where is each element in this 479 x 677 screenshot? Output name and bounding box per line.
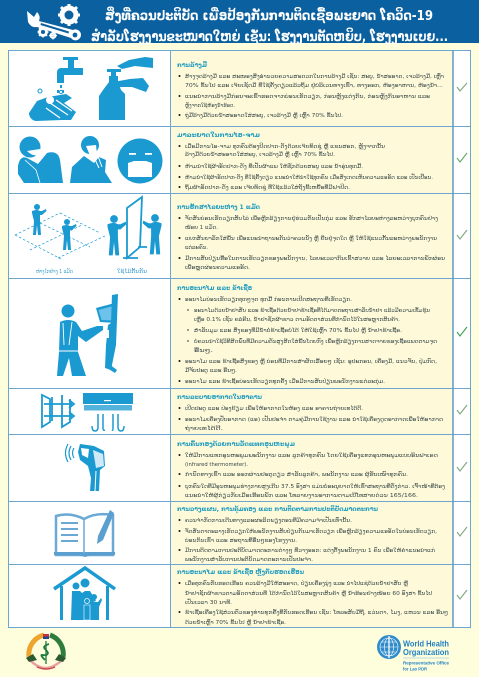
section text: 1 metre distancing: ແຍກສັນຍາລັກໃສ່ພື້ນ ເພື່ອແນະນຳຖານະກັນວ່າຄວນນັ່ງ ຫຼື ຢືນຢູ່ຈຸດໃດ ຫຼື ໃຫ້ໃຊ້ແນວກັ້ນລະຫວ່າງພະນັກງານ (185, 235, 437, 242)
icon: hand washing and sanitizer (29, 57, 153, 121)
section text: hand washing: ສ້າງຈຸດລ້າງມື ແລະ ສະໜອງສິ່ງອຳນວຍຄວາມສະດວກໃນການລ້າງມື ເຊັ່ນ: ສະບູ, ນໍ້າສະອາດ, ເຈວລ້າງມື, ເຫຼົ້າ (185, 73, 444, 80)
section text: cleaning and disinfection: ອະນາໄມດ້ວຍນໍ້າຢາສັບ ແລະ ຂ້າເຊື້ອດ້ວຍນໍ້າຢາຂ້າເຊື້ອທີ່ໄດ້ມາດຕະຖານສຳລັບນໍ້າຢາ ແລ້ວມີຄວາມເຂັ້ມຂຸ້ນ (194, 306, 430, 314)
distancing captions (36, 267, 147, 275)
title (91, 6, 448, 45)
icon: open book and pencil (54, 510, 115, 557)
section text: 1 metre distancing (177, 202, 445, 271)
check marks (457, 83, 467, 599)
section text: 1 metre distancing: ໜ້ອຍ 1 ແມັດ. (185, 224, 218, 231)
section text: hand washing: 70% ຂຶ້ນໄປ ແລະ ເຈ້ຍເຊັດມື ທີ່ໃຊ້ຄັ້ງດຽວແລ້ວຖິ້ມ ຢູ່ບໍລິເວນທາງເຂົ້າ, ທາງອອກ, ຫ້ອງອາຫານ, ຫ້ອງນ້ຳ... (185, 81, 443, 89)
section text: cough etiquette: ມາລະຍາດໃນການໄອ-ຈາມ (177, 131, 260, 139)
icon: coughing etiquette and mask (18, 136, 162, 184)
section text: cough etiquette: ຫ້າມນຳໃຊ້ຜ້າອັດປາກ-ດັງ ທີ່ເປັນຜ້າແພ ໃຫ້ຊັກດ້ວຍສະບູ ແລະ ນໍ້າອຸ່ນທຸກມື້. (185, 162, 363, 170)
header banner (0, 0, 479, 45)
section text: 1 metre distancing: ຈັດສັນບ່ອນເຮັດວຽກສັບໄລ່ ເພື່ອຫຼີກລ້ຽງການຢູ່ຮ່ວມກັນເປັນກຸ່ມ ແລະ ຮັກສາໄລຍະຫ່າງລະຫວ່າງບຸກຄົນຢ່າງ (184, 214, 438, 222)
section text: cleaning and disinfection: ອື່ນໆ. (193, 347, 213, 354)
section text: cleaning at accommodation: ຂ້າເຊື້ອເຄື່ອງໃຊ້ສ່ວນຕົວຂອງທ່ານທຸກຄັ້ງທີ່ກັບຮອດເຮືອນ ເຊັ່ນ: ໂທລະສັບມືຖື, ແວ່ນຕາ, ໄມງ, ແຫວນ ແລະ ອື່ນໆ (185, 608, 448, 616)
section text: cleaning and disinfection (177, 283, 437, 385)
section text: cleaning and disinfection: ເຫຼືອ 0.1% ເຊັ່ນ ຄລໍຣີນ, ນໍ້າຢາຊັກຜ້າຂາວ ຕາມອັດຕາສ່ວນທີ່ກຳນົດໄວ້ໃນສະຫຼາກສິນຄ້າ. (194, 315, 400, 323)
distancing captions: ໃຊ້ໄມ້ກັ້ນກັນ (117, 267, 147, 275)
section text: indoor ventilation: ເປີດປະຕູ ແລະ ປ່ອງຢ້ຽມ ເພື່ອໃຫ້ອາກາດໃນຫ້ອງ ແລະ ອາຄານຖ່າຍເທໄດ້ດີ. (185, 404, 363, 412)
section text: indoor ventilation: ຖ່າຍເທໄດ້ດີ. (185, 424, 223, 432)
section text: temperature screening: ໃຫ້ມີການແທກອຸນຫະພູມພະນັກງານ ແລະ ລູກຄ້າທຸກຄົນ ໂດຍໃຊ້ເຄື່ອງແທກອຸນຫະພູມແບບອິນຟາເຣດ (185, 452, 438, 459)
section text: cleaning and disinfection: ອະນາໄມ ແລະ ຂ້າເຊື້ອສິ່ງຂອງ ຫຼື ບ່ອນທີ່ມີການສຳຜັດເລື້ອຍໆ ເຊັ່ນ: ອຸປະກອນ, ເຄື່ອງມື, ແນວຈັບ, ປຸ່ມກົດ, (185, 357, 437, 365)
logo: World Health Organization (377, 635, 450, 672)
section text: cleaning and disinfection: ມືຈັບປະຕູ ແລະ ອື່ນໆ. (185, 367, 237, 374)
logo: Lao Ministry of Health (26, 634, 66, 669)
icon: ventilation and air conditioner (42, 393, 133, 431)
section text: temperature screening: ການຄົ້ນກອງດ້ວຍການວັດແທກອຸນຫະພູມ (177, 439, 295, 449)
section text: 1 metre distancing: ແຕ່ລະຄົນ. (185, 244, 208, 251)
logo: World Health Organization: World Health (403, 640, 449, 648)
section text: cleaning at accommodation: ນໍ້າຢາຊັກຜ້າຂາວຕາມອັດຕາສ່ວນທີ່ ໄດ້ກຳນົດໄວ້ໃນສະຫຼາກສິນຄ້າ ຫຼື ນໍ້າຮ້ອນຢ່າງໜ້ອຍ 60 ອົງສາ ຂຶ້ນໄປ (185, 589, 433, 597)
section text: planning, control and monitoring: ບ່ອນກິນເຂົ້າ ແລະ ສະຖານທີ່ອື່ນໆຂອງໂຮງງານ. (185, 537, 297, 544)
section text: cleaning and disinfection: ອະນາໄມ ແລະ ຂ້າເຊື້ອບ່ອນເຮັດວຽກທຸກຄັ້ງ ເມື່ອມີການສັບປ່ຽນພະນັກງານແຕ່ລະກຸ່ມ. (185, 377, 385, 385)
section text: hand washing: ຫຼັງຈາກໃຊ້ຫ້ອງນ້ຳຮ້ອດ. (185, 102, 235, 109)
section text: 1 metre distancing: ມີການສັບປ່ຽນຮື້ອໃນການເຮັດວຽກຂອງພະນັກງານ, ໄລຍະເວລາກິນເຂົ້າສວາຍ ແລະ ໄລຍະເວລາການພັກຜ່ອນ (185, 254, 445, 262)
section text: planning, control and monitoring: ມີການຕິດຕາມການປະຕິບັດມາດຕະການຕ່າງໆ ທີ່ວາງອອກ: ແຕ່ງຕັ້ງພະນັກງານ 1 ຄົນ ເພື່ອໃຫ້ຄຳແນະນຳແກ່ (185, 547, 435, 554)
section text: planning, control and monitoring: ຈັດສັນຕາຕະລາງເຮັດວຽກໃຫ້ພະນັກງານສັບປ່ຽນກັນມາເຮັດວຽກ ເພື່ອຫຼີກລ້ຽງຄວາມແອອັດໃນບ່ອນເຮັດວຽກ, (184, 528, 437, 535)
section text: temperature screening (177, 439, 445, 499)
section text: indoor ventilation: ການລະບາຍອາກາດໃນອາຄານ (177, 393, 262, 401)
section text: indoor ventilation (177, 393, 443, 432)
section text: hand washing: ຖູ່ມືລ້າງມືດ້ວຍນໍ້າສະອາດໃສ່ສະບູ, ເຈວລ້າງມື ຫຼື ເຫຼົ້າ 70% ຂຶ້ນໄປ. (185, 111, 343, 120)
section text: cleaning and disinfection: ສຳລັບມຸມ ແລະ ສິ່ງຂອງທີ່ມີນໍ້າບໍ່ຂ້າເຊື້ອບໍ່ໄດ້ ໃຫ້ໃຊ້ເຫຼົ້າ 70% ຂຶ້ນໄປ ຫຼື ນໍ້າຢາຂ້າເຊື້ອ. (194, 326, 402, 334)
logo: World Health Organization: for Lao PDR (403, 666, 428, 672)
section text: planning, control and monitoring: ພະນັກງານສຳລັບການປະຕິບັດມາດຕະການເປັນປະຈຳ. (185, 555, 313, 563)
section text: cough etiquette: ຫ້າມນຳໃຊ້ຜ້າອັດປາກ-ດັງ ທີ່ໃຊ້ຄັ້ງດຽວ ແນະນຳໃຫ້ນຳໃຊ້ທຸກຄົນ ເມື່ອສັງເກດເຫັນຄວາມແອອັດ ແລະ ເປັນເປື້ອນ. (185, 173, 433, 181)
section text: cleaning at accommodation: ເມື່ອທຸກຄົນກັບຮອດເຮືອນ ຄວນລ້າງມືໃຫ້ສະອາດ, ປ່ຽນເຄື່ອງນຸ່ງ ແລະ ນຳໄປແຊ່ດ້ວຍນໍ້າຢາສັບ ຫຼື (185, 579, 409, 587)
section text: 1 metre distancing: ການຮັກສາໄລຍະຫ່າງ 1 ແມັດ (177, 202, 260, 211)
distancing captions: ຫ່າງໄກຢ່າງ 1 ແມັດ (36, 267, 73, 275)
section text: cough etiquette (177, 131, 433, 192)
section text: hand washing: ແນະນຳການລ້າງມືກ່ອນຈະເຂົ້າຮອດຈາກບ່ອນເຮັດວຽກ, ກ່ອນຫຼັງແຕ່ງກິນ, ກ່ອນຫຼັງກິນອາຫານ ແລະ (185, 93, 431, 100)
section text: cleaning and disinfection: ອະນາໄມບ່ອນເຮັດວຽກທຸກໆຈຸດ ທຸກມື້ ກ່ອນການເປີດສະຖານທີ່ເຮັດວຽກ. (185, 295, 352, 303)
section text: temperature screening: ແນະນຳໃຫ້ຜູ້ກ່ຽວກັບເມືອເຮືອນພັກ ແລະ ໂທລາຍງານອາການຕາມເບີໂທສາຍດ່ວນ 165/166. (185, 492, 418, 499)
section text: temperature screening: ກຳນົດທາງເຂົ້າ ແລະ ອອກຜ່ານປະຕູດຽວ ສຳລັບລູກຄ້າ, ພະນັກງານ ແລະ ຜູ້ຮັບເໝົາທຸກຄົນ. (185, 471, 408, 478)
logo: World Health Organization: Organization (403, 648, 449, 657)
logo: World Health Organization: Representative Office (403, 660, 450, 666)
section text: cough etiquette: ຖິ້ມຜ້າອັດປາກ-ດັງ ແລະ ເຈ້ຍທິດຊູ່ ທີ່ໃຊ້ແລ້ວໃສ່ຖັງຂີ້ເຫຍື້ອທີ່ມີຝາປິດ. (185, 183, 350, 192)
section text: cough etiquette: ລ້າງມືດ້ວຍນໍ້າສະອາດໃສ່ສະບູ, ເຈວລ້າງມື ຫຼື ເຫຼົ້າ 70% ຂຶ້ນໄປ. (185, 150, 335, 158)
section text: hand washing: ການລ້າງມື (177, 60, 208, 69)
section text: 1 metre distancing: ເພື່ອຫຼຸດຜ່ອນຄວາມແອອັດ. (185, 264, 250, 271)
section text: hand washing (177, 60, 444, 120)
icon: person cleaning surfaces (57, 294, 118, 376)
section text: temperature screening: ບຸກຄົນໃດທີ່ມີອຸນຫະພູມຮ່າງກາຍສູງເກີນ 37.5 ອົງສາ ແມ່ນບໍ່ອະນຸຍາດໃຫ້ເຂົ້າສະຖານທີ່ດັ່ງກ່າວ. ເຈົ້າໜ້າທີ່ຕ້ອງ (185, 483, 445, 490)
section text: planning, control and monitoring (177, 504, 437, 563)
section text: indoor ventilation: ອະນາໄມເຄື່ອງປັບອາກາດ (ແອ) ເປັນປະຈຳ ຕາມຄູ່ມືການໃຊ້ງານ ແລະ ນຳໃຊ້ເຄື່ອງດູດອາກາດເພື່ອໃຫ້ອາກາດ (185, 415, 443, 423)
section text: cleaning and disinfection: ການອະນາໄມ ແລະ ຂ້າເຊື້ອ (177, 283, 252, 292)
title: ສິ່ງທີ່ຄວນປະຕິບັດ ເພື່ອປ້ອງກັນການຕິດເຊື້ອພະຍາດ ໂຄວິດ-19 (105, 6, 433, 24)
section text: cough etiquette: ເມື່ອມີການໄອ-ຈາມ ທຸກຄົນຕ້ອງປິດປາກ-ດັງດ້ວຍເຈ້ຍທິດຊູ່ ຫຼື ແຂນສອກ, ຫຼັງຈາກນັ້ນ (185, 142, 385, 151)
section text: cleaning at accommodation: ການອະນາໄມ ແລະ ຂ້າເຊື້ອ ຫຼັງກັບຮອດເຮືອນ (177, 567, 304, 576)
section text: temperature screening: (infrared thermometer). (185, 462, 248, 468)
icon: infrared thermometer (66, 444, 105, 491)
section text: cleaning at accommodation: ເປັນເວລາ 30 ນາທີ. (185, 598, 232, 606)
section text: cleaning and disinfection: ບໍ່ຄວນນຳໃຊ້ວິທີສີດພົ່ນທີ່ມີຄວາມດັນສູງສີດໃສ່ພື້ນໂດຍກົງ ເພື່ອຫຼີກລ້ຽງການສາດຈາຍຂອງເຊື້ອແພດຕາມຈຸດ (194, 338, 437, 345)
icon: family at home (54, 568, 115, 620)
section text: cleaning at accommodation (177, 567, 448, 626)
icon: physical distancing (15, 197, 162, 275)
section text: cleaning at accommodation: ດ້ວຍນໍ້າເຫຼົ້າ 70% ຂຶ້ນໄປ ຫຼື ນໍ້າຢາຂ້າເຊື້ອ. (185, 618, 286, 626)
section text: planning, control and monitoring: ການວາງແຜນ, ການຄຸ້ມຄອງ ແລະ ການຕິດຕາມການປະຕິບັດມາດຕະການ (177, 504, 378, 514)
section text: planning, control and monitoring: ຄວນຈຳກັດການເດີນທາງແລະຜະລິດພຽງຕອນທີ່ມີຄວາມຈຳເປັນເທົ່ານັ້ນ. (185, 516, 352, 524)
icon: wrench and gears (27, 4, 81, 40)
